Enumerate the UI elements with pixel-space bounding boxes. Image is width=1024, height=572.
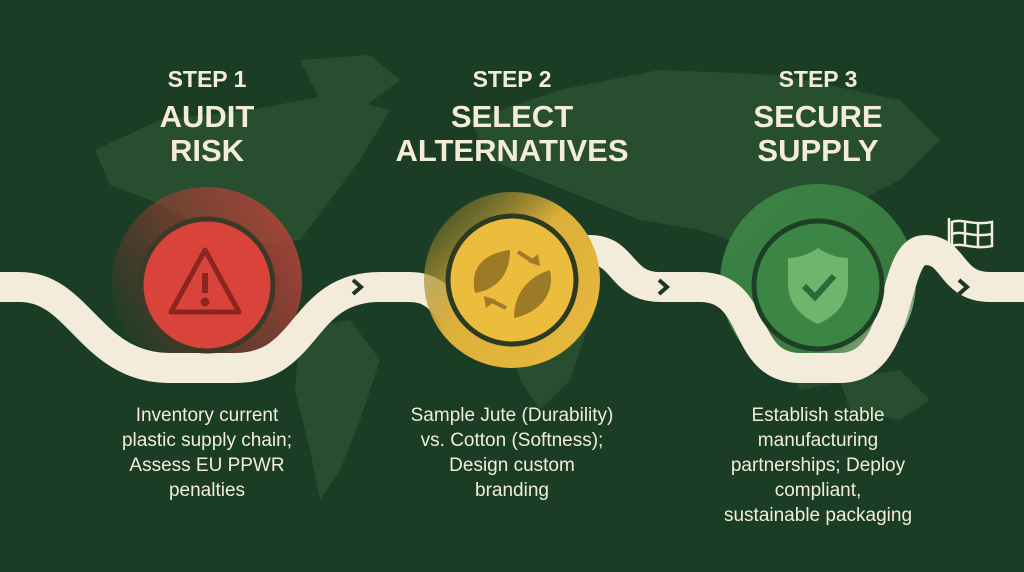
- titles: ALTERNATIVES: [395, 133, 629, 168]
- path: [0, 250, 1024, 368]
- world map: [95, 55, 940, 500]
- yellow ring: [424, 192, 600, 368]
- titles: AUDIT: [160, 99, 254, 134]
- titles: STEP 1: [168, 66, 247, 92]
- green circle: [754, 221, 882, 349]
- icon: shield: [788, 248, 848, 324]
- icon: warning: [171, 250, 239, 312]
- titles: SUPPLY: [757, 133, 879, 168]
- titles: STEP 2: [473, 66, 551, 92]
- chevrons: [353, 280, 967, 294]
- descriptions: vs. Cotton (Softness);: [421, 430, 603, 451]
- titles: SELECT: [451, 99, 573, 134]
- red circle: [141, 219, 273, 351]
- titles: [160, 66, 883, 168]
- descriptions: Establish stable: [751, 405, 885, 426]
- titles: SECURE: [753, 99, 883, 134]
- descriptions: branding: [475, 480, 549, 501]
- descriptions: compliant,: [775, 480, 861, 501]
- descriptions: Sample Jute (Durability): [411, 405, 613, 426]
- outer rings: [112, 184, 916, 380]
- titles: STEP 3: [779, 66, 857, 92]
- descriptions: sustainable packaging: [724, 505, 912, 526]
- descriptions: [122, 405, 912, 526]
- descriptions: penalties: [169, 480, 245, 501]
- icon: flag: [949, 218, 992, 272]
- descriptions: plastic supply chain;: [122, 430, 292, 451]
- descriptions: Assess EU PPWR: [129, 455, 285, 476]
- icon: leaves recycle: [474, 250, 551, 318]
- descriptions: partnerships; Deploy: [731, 455, 906, 476]
- yellow circle: [448, 216, 576, 344]
- descriptions: Inventory current: [136, 405, 279, 426]
- titles: RISK: [170, 133, 245, 168]
- descriptions: manufacturing: [758, 430, 878, 451]
- descriptions: Design custom: [449, 455, 575, 476]
